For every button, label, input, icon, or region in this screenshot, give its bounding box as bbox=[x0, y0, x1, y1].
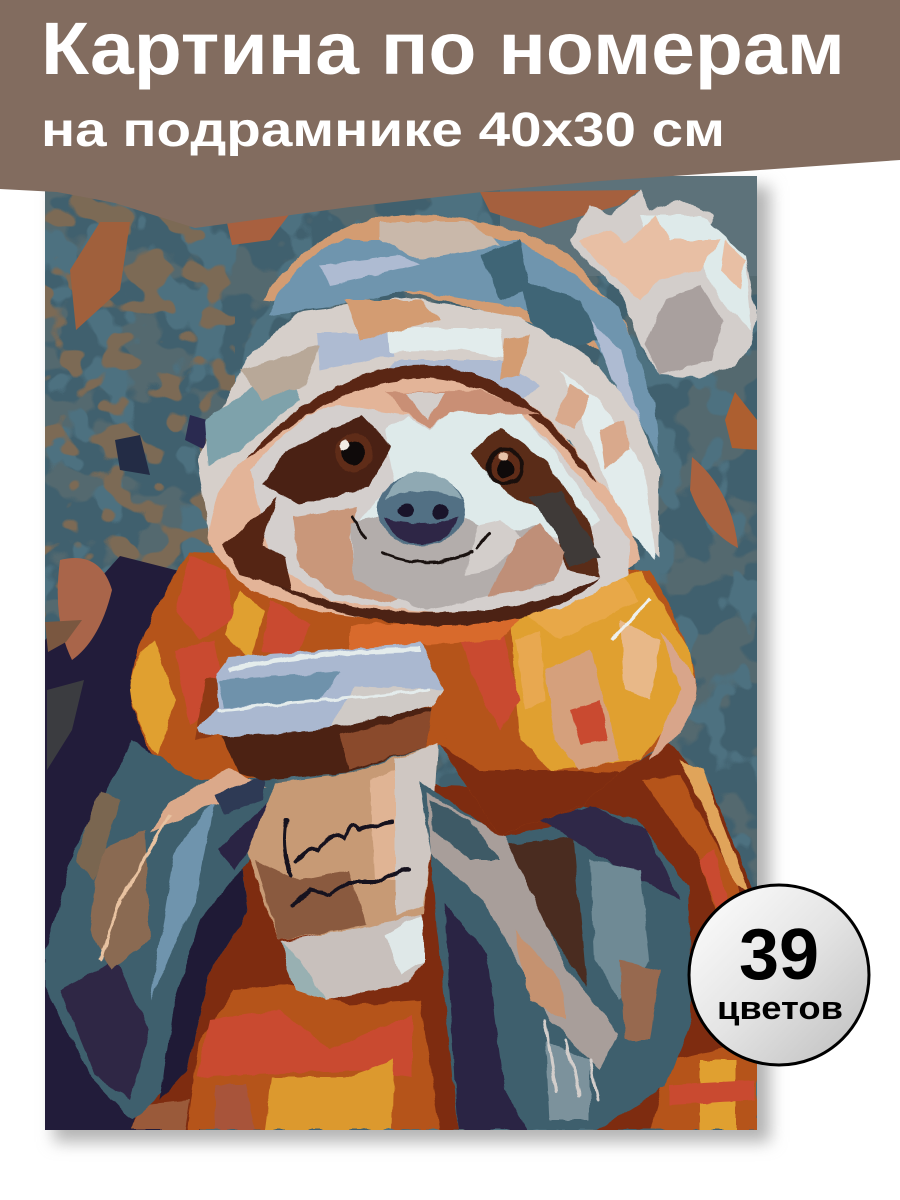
hat shadow arc bbox=[248, 365, 597, 482]
smile bbox=[352, 517, 490, 562]
lid bbox=[197, 643, 444, 737]
pompom bbox=[570, 190, 757, 378]
cup sleeve bbox=[247, 743, 438, 940]
cup bottom bbox=[281, 913, 424, 1000]
left arm bbox=[45, 740, 275, 1120]
sweater bbox=[132, 743, 757, 1130]
hat bbox=[197, 215, 659, 560]
coffee cup bbox=[197, 643, 444, 1000]
painting background bbox=[45, 176, 757, 1130]
canvas shadow bbox=[54, 186, 770, 1142]
coffee band bbox=[222, 708, 431, 780]
painted subject bbox=[45, 190, 757, 1130]
left eye bbox=[335, 434, 373, 472]
head bbox=[208, 367, 640, 623]
forehead grey and white bbox=[250, 405, 630, 612]
header band bbox=[0, 0, 900, 228]
title: Картина по номерам bbox=[41, 7, 845, 90]
chin brown rim bbox=[274, 577, 601, 625]
cup handwriting bbox=[284, 820, 408, 905]
left cheek stripe bbox=[223, 497, 292, 590]
subtitle: на подрамнике 40х30 см bbox=[41, 104, 725, 157]
right arm bbox=[419, 780, 692, 1130]
right eye bbox=[486, 448, 524, 486]
right cheek bbox=[488, 523, 565, 597]
painting: sloth with coffee bbox=[45, 176, 757, 1130]
badge: 39 colours: цветов bbox=[717, 990, 843, 1026]
right eye patch bbox=[470, 427, 601, 577]
muzzle bbox=[350, 515, 565, 610]
scarf bbox=[130, 552, 697, 835]
badge: 39 colours: 39 bbox=[739, 915, 819, 995]
sloth face bbox=[208, 365, 640, 625]
left eye patch bbox=[262, 415, 392, 505]
badge: 39 colours bbox=[689, 885, 869, 1065]
nose bbox=[377, 473, 465, 546]
right dark stripe bbox=[528, 490, 601, 567]
left cheek bbox=[293, 507, 398, 602]
